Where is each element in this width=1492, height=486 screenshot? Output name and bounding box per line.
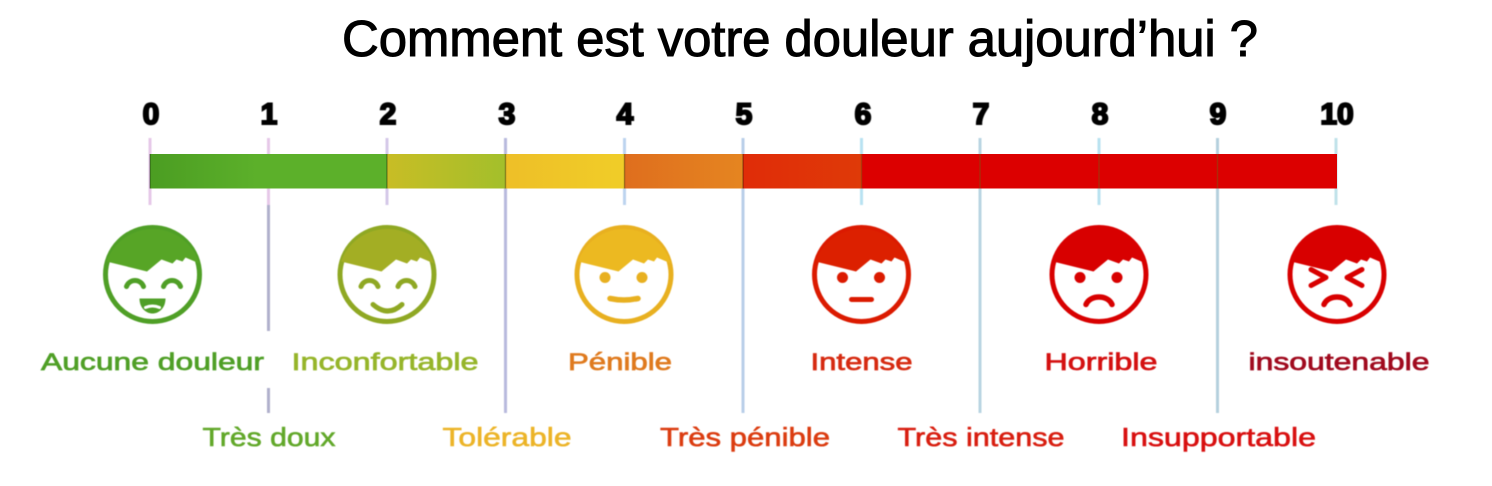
scale numbers: 6 (855, 98, 871, 131)
lower labels: Très intense (898, 422, 1064, 452)
scale numbers: 2 (380, 98, 396, 131)
lower labels: Très pénible (660, 422, 830, 452)
title: Comment est votre douleur aujourd’hui ? (342, 10, 1258, 67)
icon: face, unbearable (1290, 228, 1384, 322)
icon: face, uncomfortable (340, 228, 434, 322)
scale numbers: 8 (1092, 98, 1108, 131)
upper labels (41, 349, 1430, 376)
icon: face, no pain (106, 228, 200, 322)
upper labels: Intense (810, 349, 912, 376)
scale numbers: 3 (499, 98, 515, 131)
scale numbers: 7 (973, 98, 989, 131)
pain scale bar (150, 154, 1337, 188)
lower labels: Très doux (202, 422, 336, 452)
scale numbers: 5 (736, 98, 752, 131)
scale numbers: 9 (1210, 98, 1226, 131)
upper labels: Inconfortable (292, 349, 478, 376)
tick marks (150, 138, 1336, 413)
icon: face, intense (814, 228, 908, 322)
lower labels: Insupportable (1121, 422, 1316, 452)
scale numbers: 4 (617, 98, 634, 131)
upper labels: Aucune douleur (41, 349, 264, 376)
scale numbers: 1 (261, 98, 277, 131)
upper labels: Pénible (568, 349, 672, 376)
icon: face, horrible (1052, 228, 1146, 322)
lower labels (202, 422, 1316, 452)
icon: face, painful (577, 228, 671, 322)
upper labels: insoutenable (1248, 349, 1430, 376)
scale numbers: 10 (1320, 98, 1354, 131)
scale numbers: 0 (143, 98, 159, 131)
upper labels: Horrible (1044, 349, 1158, 376)
lower labels: Tolérable (442, 422, 572, 452)
scale numbers (143, 98, 1354, 131)
